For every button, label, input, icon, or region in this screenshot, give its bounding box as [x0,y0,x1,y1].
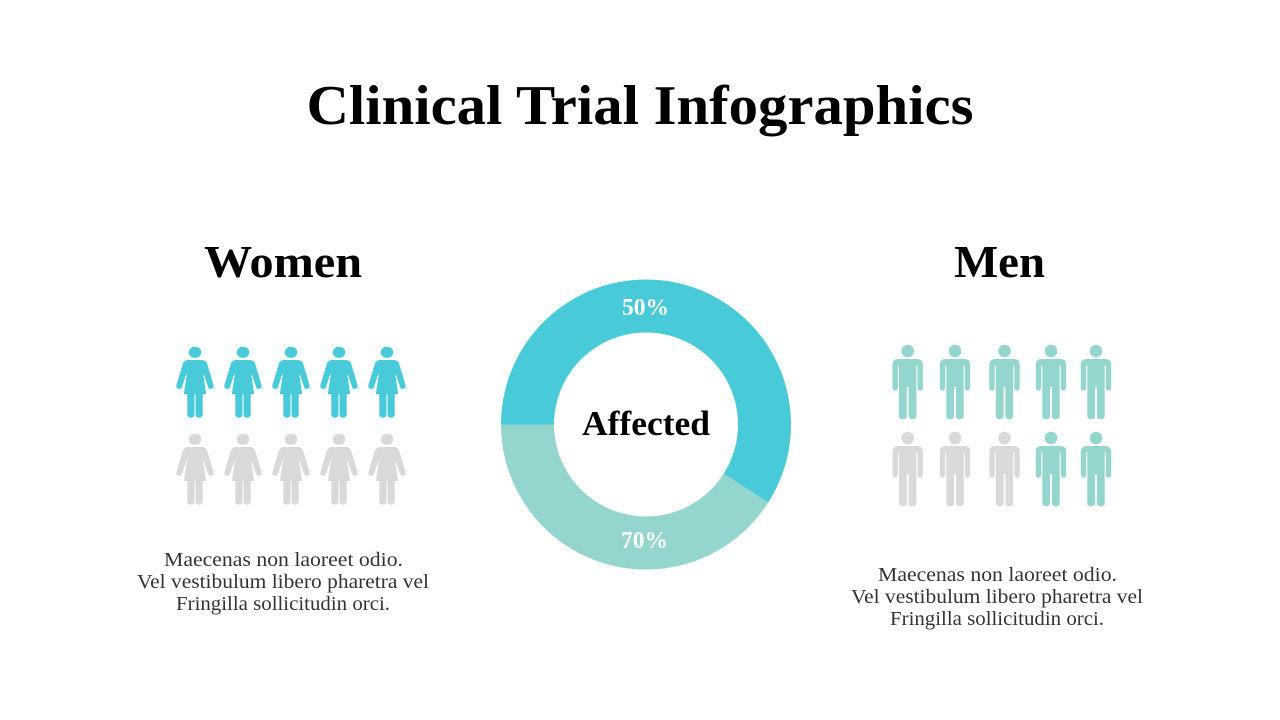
text block: women description: Vel vestibulum libero pharetra vel [137,571,429,593]
icon row: men top [892,345,1111,419]
text block: women description: Fringilla sollicitudin orci. [176,593,390,615]
donut chart: affected [501,280,791,570]
heading: men: Men [954,236,1045,287]
panel: men [851,236,1143,630]
text block: women description [137,549,429,615]
text block: men description [851,564,1143,630]
segment: women 50% [501,280,791,502]
label: 50%: 50% [622,295,669,321]
icon row: unaffected women [176,434,406,505]
text block: men description: Vel vestibulum libero pharetra vel [851,586,1143,608]
icon row: affected women [176,347,406,418]
label: 70%: 70% [621,528,668,554]
title: Clinical Trial Infographics [306,75,974,137]
segment: men 70% [501,424,768,570]
text block: men description: Fringilla sollicitudin orci. [890,608,1104,630]
panel: women [137,236,429,615]
text block: women description: Maecenas non laoreet odio. [164,549,403,571]
icon row: men bottom [892,432,1111,506]
text block: men description: Maecenas non laoreet odio. [878,564,1117,586]
heading: women: Women [204,236,362,287]
label: affected: Affected [582,404,711,443]
